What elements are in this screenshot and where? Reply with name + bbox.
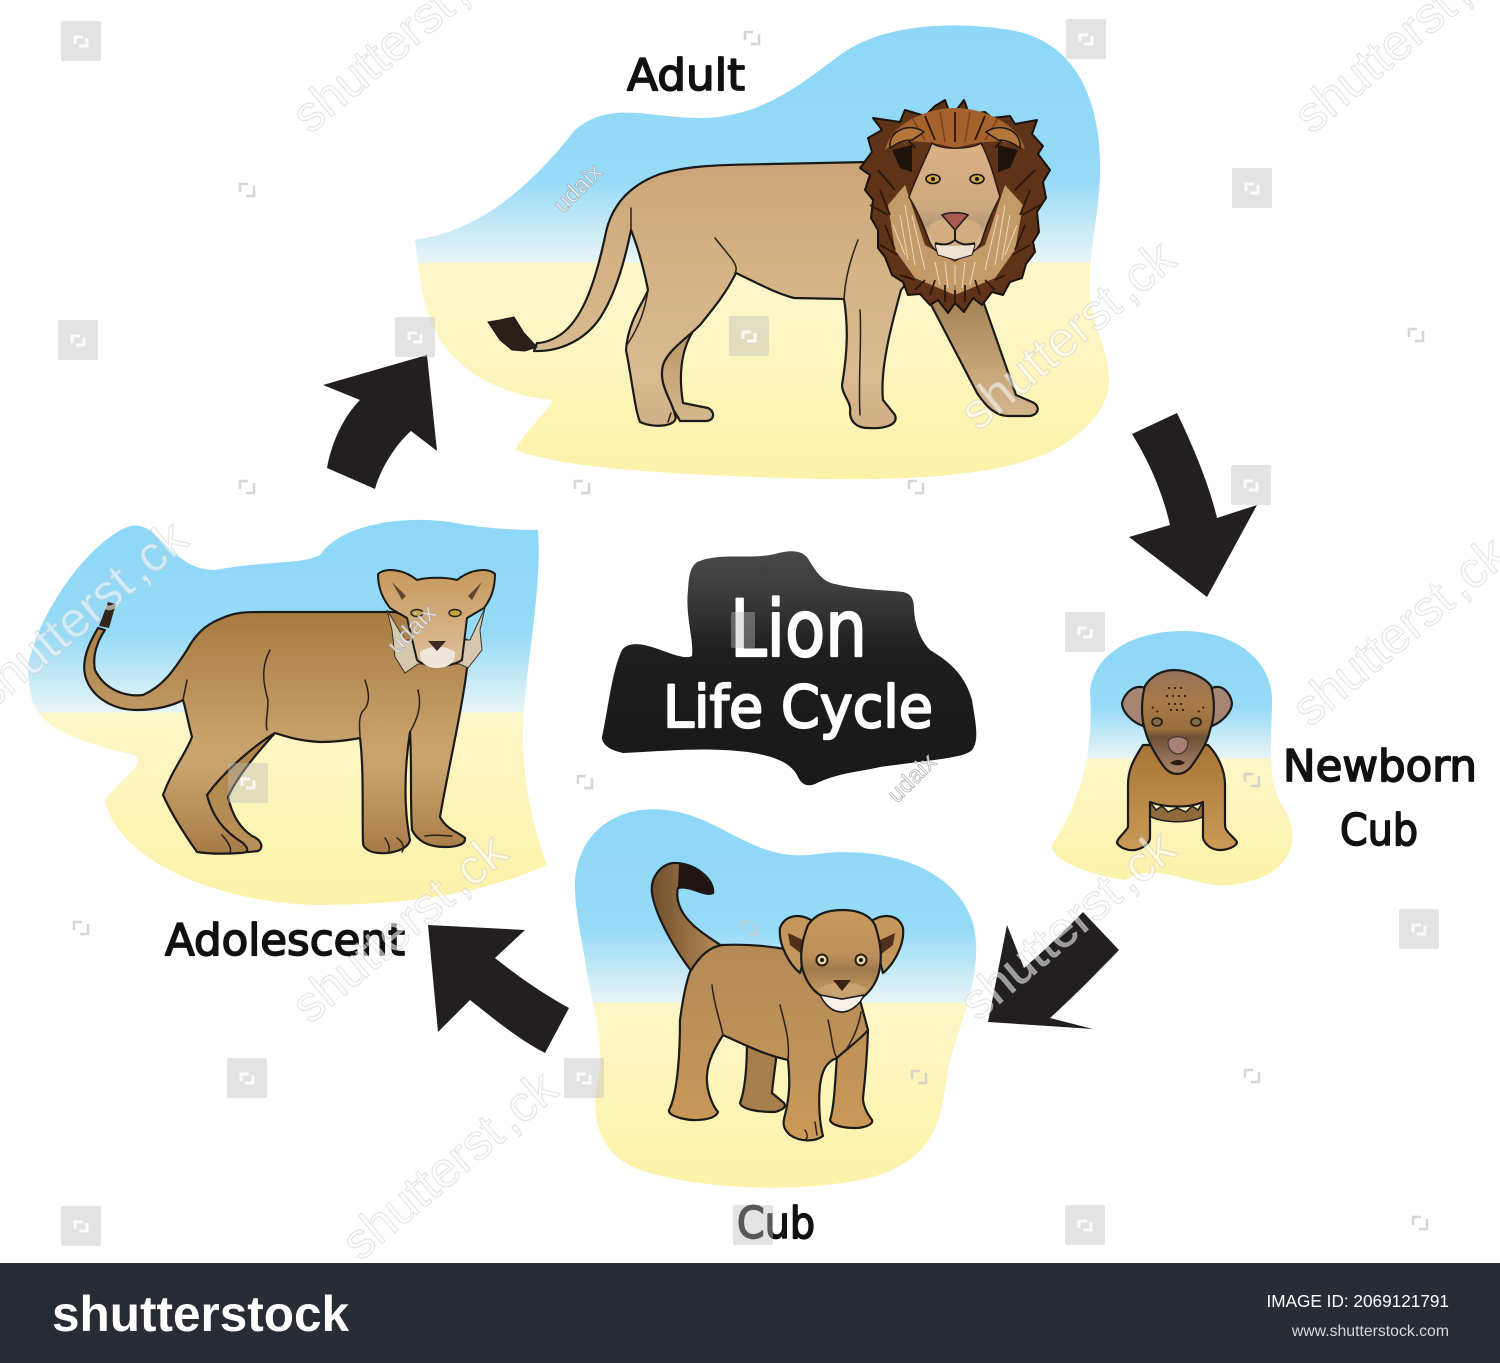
panel: cub scene [575, 809, 976, 1188]
cub muzzle [818, 982, 868, 1000]
watermark layer: udaix [382, 600, 442, 659]
cub ears [780, 916, 903, 973]
newborn markings [1152, 688, 1204, 712]
adolescent muzzle [420, 647, 455, 668]
cub tail tip [678, 864, 714, 893]
cub nose [833, 980, 851, 991]
label: adolescent: Adolescent [165, 915, 405, 966]
label: adult: Adult [627, 50, 745, 101]
footer bar [0, 1263, 1500, 1363]
arrow: newborn to cub [988, 912, 1119, 1029]
adult nose [942, 213, 968, 230]
watermark layer: udaix [882, 749, 942, 808]
watermark layer: shutterst,ck [281, 822, 518, 1033]
adult mane strands [870, 112, 1040, 305]
newborn eyes [1152, 718, 1201, 726]
cub far front leg [830, 1020, 872, 1128]
illustration: adult lion [488, 100, 1050, 428]
adult ears [890, 128, 1020, 148]
background blob: newborn [1052, 631, 1293, 885]
adult body and tail [534, 162, 905, 428]
adolescent tail tip [99, 602, 116, 628]
background blob: cub [575, 809, 976, 1188]
panel: newborn cub scene [1052, 631, 1293, 885]
cub chin [820, 995, 864, 1012]
label: newborn cub: Newborn [1283, 741, 1477, 792]
adult mane ruff [888, 185, 1023, 295]
panel: adult scene [415, 25, 1109, 479]
adult tail tuft [488, 317, 537, 351]
cub tail [652, 863, 722, 972]
subtitle text: Life Cycle [663, 673, 933, 741]
adult mane [860, 100, 1050, 313]
background blob: adolescent [28, 520, 547, 905]
illustration: cub lion [652, 863, 903, 1140]
illustration: newborn cub [1117, 670, 1237, 850]
watermark layer: shutterst,ck [949, 229, 1186, 440]
cub head [801, 910, 881, 1012]
cub far hind leg [740, 1040, 785, 1112]
adult muzzle [935, 241, 975, 260]
adolescent eyes [411, 610, 461, 616]
adolescent ruff [387, 608, 485, 673]
adolescent body and tail [84, 612, 467, 854]
adult mane crown [885, 108, 1025, 150]
title text: Lion [730, 585, 867, 675]
label: newborn cub [1283, 741, 1477, 856]
adolescent ears inner [392, 582, 482, 600]
image id: IMAGE ID: 2069121791 [1266, 1291, 1449, 1311]
label: cub: Cub [737, 1198, 815, 1249]
title plate [602, 551, 976, 785]
illustration: adolescent lion [84, 570, 495, 854]
adolescent head [378, 570, 495, 666]
adolescent far hind leg [195, 725, 275, 852]
arrow: cub to adolescent [428, 925, 569, 1053]
newborn belly [1148, 802, 1205, 822]
adolescent nose [428, 641, 446, 651]
adult face [909, 143, 1000, 257]
footer logo text: shutterstock [52, 1286, 349, 1342]
newborn body [1117, 745, 1237, 850]
newborn head [1142, 670, 1214, 774]
panel: adolescent scene [28, 520, 547, 905]
arrow: adult to newborn [1129, 413, 1257, 597]
watermark layer: shutterst,ck [949, 819, 1186, 1030]
cub body [669, 945, 868, 1140]
cub eyes [816, 954, 866, 966]
arrow: adolescent to adult [323, 355, 437, 489]
newborn nose and mouth [1168, 737, 1188, 765]
watermark layer: udaix [548, 159, 608, 218]
label: newborn cub: Cub [1340, 805, 1418, 856]
background blob: adult [415, 25, 1109, 479]
newborn ears [1122, 687, 1232, 726]
adult eyes [926, 174, 984, 184]
adult far hind leg [656, 333, 713, 421]
site url: www.shutterstock.com [1291, 1323, 1449, 1340]
watermark layer: shutterst,ck [331, 1059, 568, 1270]
adult far front leg [926, 295, 1038, 416]
